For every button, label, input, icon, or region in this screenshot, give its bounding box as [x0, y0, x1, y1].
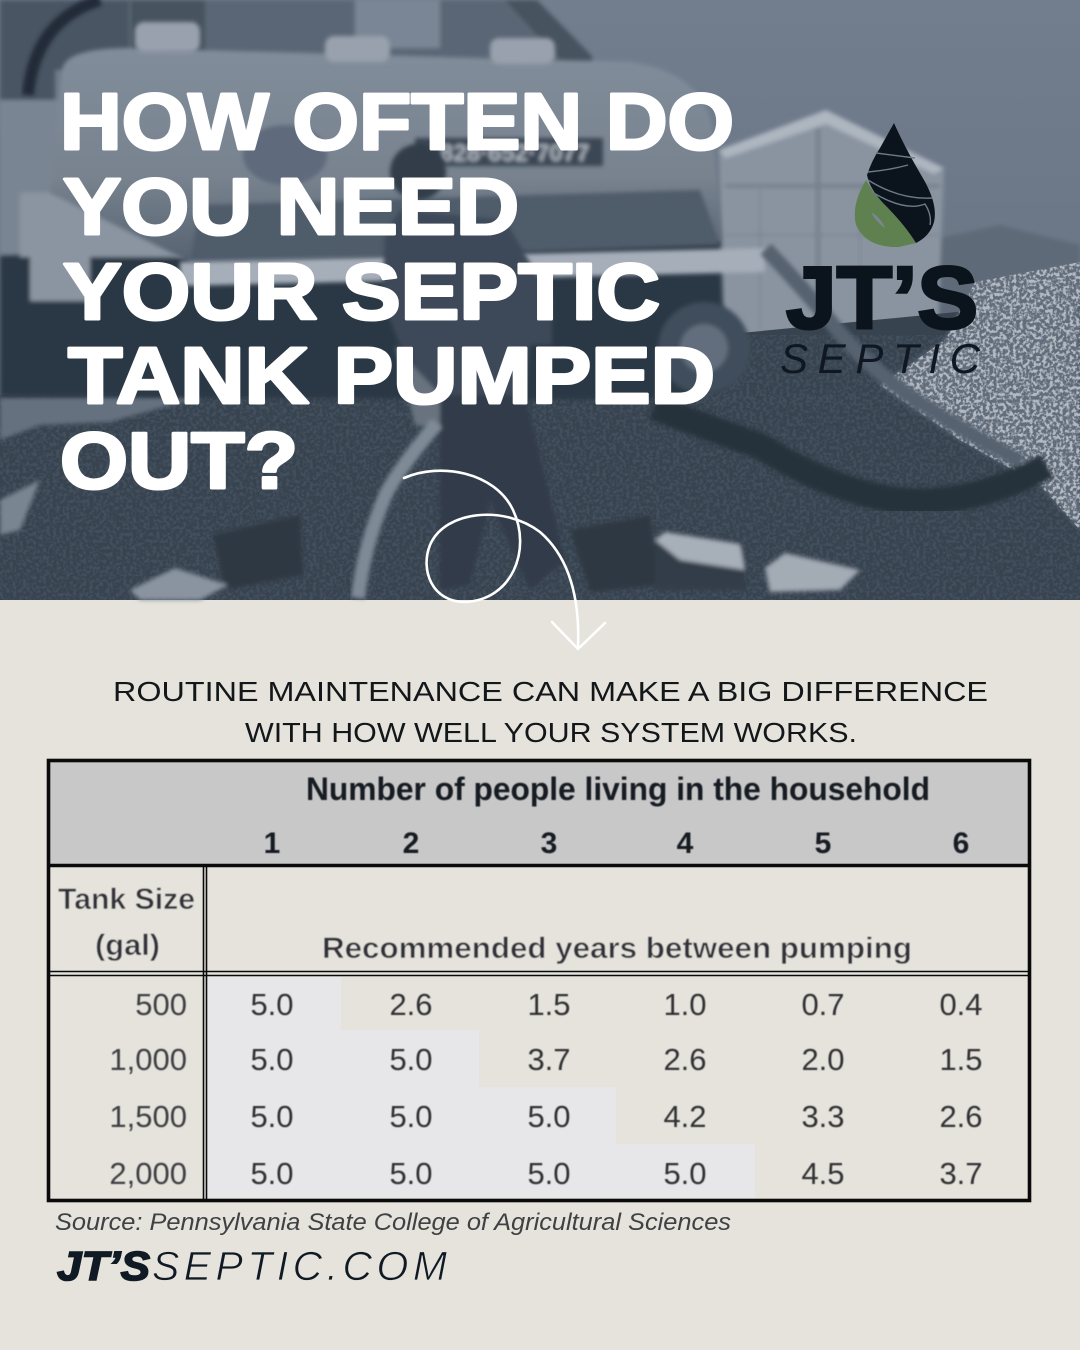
values: 2.6 [663, 1042, 707, 1077]
header labels: 1 [264, 827, 280, 860]
header labels: Number of people living in the household [306, 771, 930, 807]
title: YOUR SEPTIC [63, 247, 660, 336]
header labels: 4 [677, 827, 694, 860]
corrugated hose [358, 423, 437, 598]
values: 3.7 [527, 1042, 571, 1077]
tank body [50, 48, 722, 262]
values: 5.0 [527, 1156, 571, 1191]
values: 1.0 [663, 987, 707, 1022]
tank size column: 500 [135, 987, 187, 1022]
small shed [719, 110, 944, 335]
upper hose [766, 249, 1022, 462]
logo wordmark SEPTIC: SEPTIC [780, 335, 981, 382]
values: 5.0 [250, 1099, 294, 1134]
tank size column: 2,000 [109, 1156, 187, 1191]
title: HOW OFTEN DO [60, 77, 734, 166]
values: 4.5 [801, 1156, 845, 1191]
tank branding: 828·652·7077 [440, 140, 589, 167]
light gravel patches [880, 262, 1080, 530]
header labels [264, 771, 969, 860]
values: 5.0 [527, 1099, 571, 1134]
dark gravel ground [0, 300, 1080, 600]
values: 5.0 [389, 1099, 433, 1134]
tank branding [243, 125, 603, 185]
values: 5.0 [250, 987, 294, 1022]
icon: green leaf [855, 180, 916, 247]
subheading: WITH HOW WELL YOUR SYSTEM WORKS. [245, 717, 857, 748]
hero photo: technician pumping a septic tank from a truck [0, 0, 1080, 600]
leaf notch [871, 212, 885, 228]
values: 1.5 [939, 1042, 983, 1077]
values: 5.0 [250, 1042, 294, 1077]
arrow: loop pointing to the table [404, 471, 605, 649]
values: 0.7 [801, 987, 845, 1022]
table: recommended years between pumping [48, 760, 1030, 1200]
worker [382, 144, 565, 590]
black suction hose [654, 407, 1047, 501]
header labels: 2 [403, 827, 419, 860]
title: YOU NEED [63, 162, 519, 251]
table frame [48, 760, 1030, 1200]
table header band [49, 761, 1029, 865]
tank size column: 1,000 [109, 1042, 187, 1077]
values: 5.0 [663, 1156, 707, 1191]
header labels: 3 [541, 827, 557, 860]
truck dark undercarriage [0, 0, 725, 400]
title: TANK PUMPED [68, 331, 715, 420]
values [250, 987, 983, 1191]
values: 2.0 [801, 1042, 845, 1077]
house behind the truck [130, 0, 592, 90]
row and column captions [58, 883, 912, 965]
distant hills [930, 225, 1080, 330]
footer website: JT’S [57, 1243, 150, 1289]
tank size column [109, 987, 187, 1191]
subheading: ROUTINE MAINTENANCE CAN MAKE A BIG DIFFERENCE [113, 676, 988, 707]
dark hose over the truck [28, 0, 100, 95]
lower tank bands and hose coil [190, 190, 720, 262]
tank size column: 1,500 [109, 1099, 187, 1134]
gravel speckle [0, 395, 1080, 600]
logo: JT's Septic [780, 123, 981, 382]
row and column captions: Recommended years between pumping [322, 932, 912, 965]
values: 5.0 [250, 1156, 294, 1191]
values: 2.6 [939, 1099, 983, 1134]
tank hatches [135, 22, 555, 64]
values: 5.0 [389, 1042, 433, 1077]
landscape bricks [130, 515, 860, 600]
values: 3.7 [939, 1156, 983, 1191]
title: OUT? [60, 416, 298, 505]
values: 3.3 [801, 1099, 845, 1134]
logo wordmark JT'S: JT’S [786, 248, 978, 347]
header labels: 6 [953, 827, 969, 860]
values: 2.6 [389, 987, 433, 1022]
header labels: 5 [815, 827, 831, 860]
values: 0.4 [939, 987, 983, 1022]
icon: water drop [867, 123, 935, 243]
values: 1.5 [527, 987, 571, 1022]
row and column captions: Tank Size [58, 883, 195, 916]
values: 4.2 [663, 1099, 707, 1134]
footer website: SEPTIC.COM [152, 1243, 448, 1289]
light highlighted staircase cells [207, 977, 755, 1198]
row and column captions: (gal) [95, 929, 160, 962]
source note: Source: Pennsylvania State College of Agricultural Sciences [55, 1209, 731, 1236]
title [60, 77, 734, 505]
truck flatbed rail [180, 248, 765, 286]
subheading [113, 676, 988, 748]
truck wheel [658, 302, 750, 394]
values: 5.0 [389, 1156, 433, 1191]
